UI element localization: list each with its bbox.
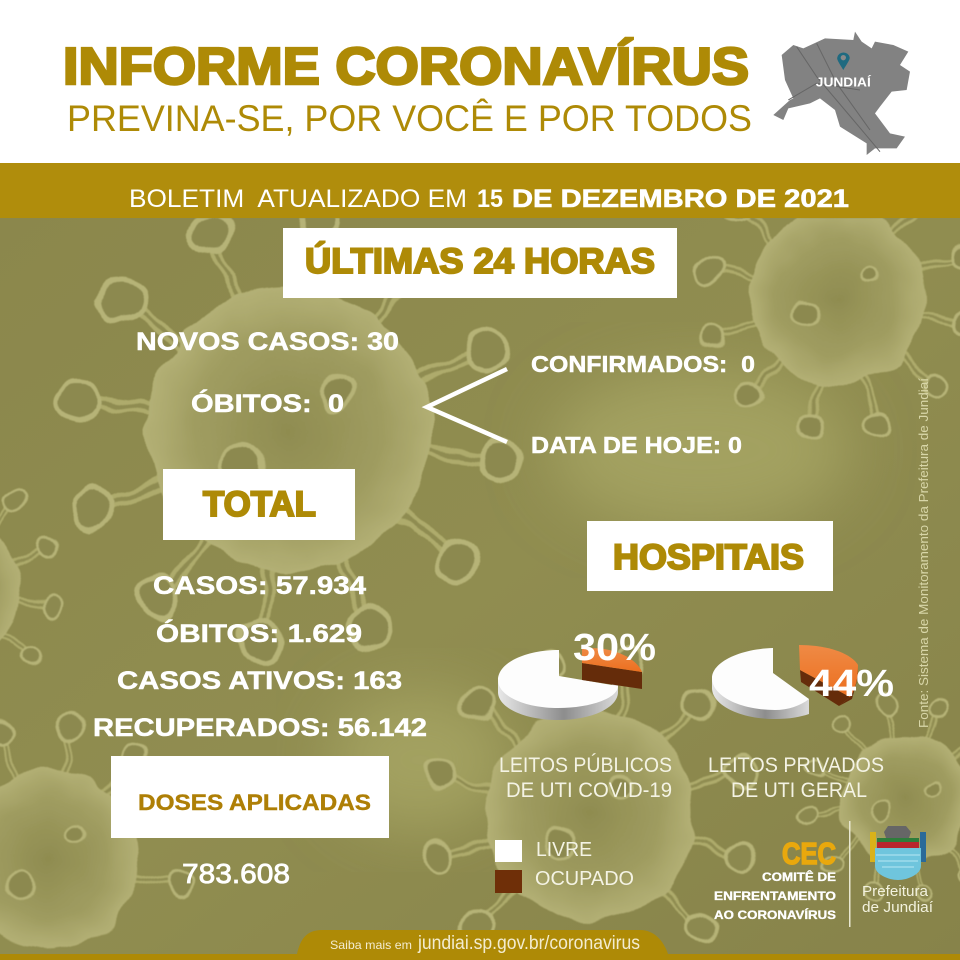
label: private ICU beds [708,754,884,802]
active cases: CASOS ATIVOS: 163 [117,667,402,695]
heading: últimas 24 horas [283,228,677,298]
today's date count: DATA DE HOJE: 0 [531,432,742,458]
label: public ICU beds [499,754,672,802]
logo: CEC committee: CEC [782,836,836,871]
text: Prefeitura de Jundiaí [862,883,934,916]
label: public ICU beds: DE UTI COVID-19 [506,779,672,802]
value: 44% [809,663,894,705]
icon: map of Jundiaí [773,32,910,155]
bulletin date: BOLETIM ATUALIZADO EM [129,185,467,213]
date band [0,163,960,218]
footer link: Saiba mais em [330,938,412,952]
map label: JUNDIAÍ [816,75,871,90]
heading: doses applied [111,756,389,838]
pin [837,52,850,70]
subtitle: PREVINA-SE, POR VOCÊ E POR TODOS [67,98,752,139]
legend: LIVRE [536,839,592,861]
deaths today: ÓBITOS: 0 [191,388,344,418]
heading: últimas 24 horas: ÚLTIMAS 24 HORAS [305,241,655,281]
text: Prefeitura de Jundiaí: de Jundiaí [862,899,934,916]
total deaths: ÓBITOS: 1.629 [156,618,362,648]
heading: total [163,469,355,540]
text: Prefeitura de Jundiaí: Prefeitura [862,883,929,900]
value: 30% [573,627,656,669]
source note: Fonte: Sistema de Monitoramento da Prefeitura de Jundiaí [917,377,931,728]
legend: OCUPADO [535,868,634,890]
recovered: RECUPERADOS: 56.142 [93,714,427,742]
heading: hospitais: HOSPITAIS [613,538,804,577]
logo: CEC committee: COMITÊ DE [762,871,836,884]
header background [0,0,960,163]
heading: hospitais [587,521,833,591]
confirmed: CONFIRMADOS: 0 [531,351,755,377]
label: private ICU beds: DE UTI GERAL [731,779,867,802]
title: INFORME CORONAVÍRUS [63,38,749,96]
logo: CEC committee [714,836,836,922]
logo: CEC committee: ENFRENTAMENTO [714,891,836,903]
bulletin date: 15 [477,185,503,213]
legend [495,839,634,893]
arrow: branching lines [427,369,507,442]
chart: private ICU pie 44% [712,645,894,719]
label: private ICU beds: LEITOS PRIVADOS [708,754,884,777]
doses value: 783.608 [182,858,290,889]
logo: CEC committee: AO CORONAVÍRUS [714,909,836,922]
new cases: NOVOS CASOS: 30 [136,328,399,356]
bulletin date [129,185,849,213]
heading: total: TOTAL [203,485,316,524]
icon: Prefeitura coat of arms [870,826,926,880]
footer band: jundiai.sp.gov.br/coronavirus [417,933,640,954]
chart: public ICU pie 30% [498,627,656,720]
label: public ICU beds: LEITOS PÚBLICOS [499,754,672,777]
total cases: CASOS: 57.934 [153,572,366,600]
panel: virus background [0,218,960,954]
heading: doses applied: DOSES APLICADAS [138,790,371,815]
bulletin date: DE DEZEMBRO DE 2021 [512,185,849,213]
footer band [0,930,960,960]
